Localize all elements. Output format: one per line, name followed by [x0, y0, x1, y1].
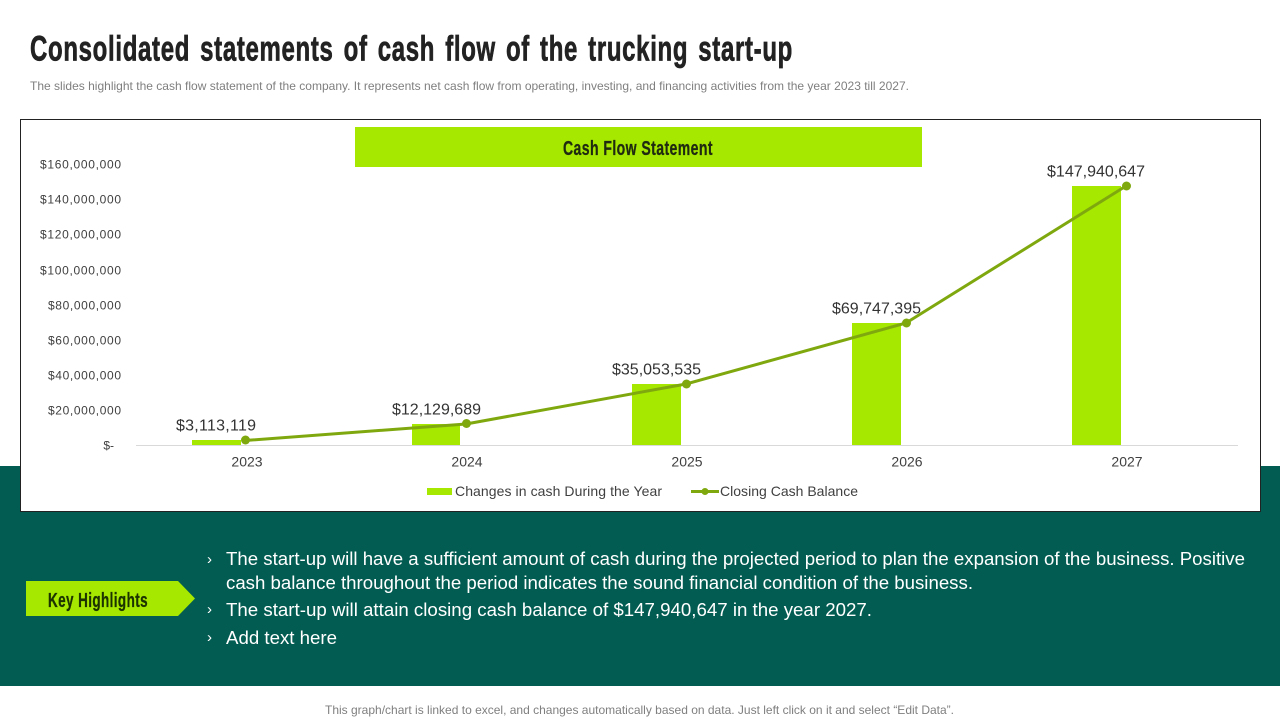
- y axis labels: $120,000,000: [40, 228, 121, 242]
- key highlights arrow: [26, 581, 195, 616]
- y axis labels: $100,000,000: [40, 264, 121, 278]
- footer note: This graph/chart is linked to excel, and changes automatically based on data. Just left click on it and select “Edit Data”.: [325, 703, 954, 717]
- data labels: $35,053,535: [612, 362, 701, 378]
- x axis labels: 2023: [231, 454, 263, 470]
- subtitle: The slides highlight the cash flow statement of the company. It represents net cash flow from operating, investing, and financing activities from the year 2023 till 2027.: [30, 79, 909, 93]
- y axis labels: $160,000,000: [40, 158, 121, 172]
- data labels: $147,940,647: [1047, 164, 1145, 180]
- y axis labels: $40,000,000: [48, 368, 121, 382]
- y axis labels: [40, 158, 121, 452]
- data labels: [176, 164, 1145, 434]
- bars: changes in cash: [192, 186, 1121, 445]
- highlights list: ›: [207, 601, 212, 618]
- title: Consolidated statements of cash flow of the trucking start-up: [30, 30, 793, 68]
- legend: [427, 483, 858, 499]
- highlights list: ›: [207, 629, 212, 646]
- highlights list: [207, 549, 1245, 648]
- x axis labels: 2025: [671, 454, 703, 470]
- x axis labels: 2026: [891, 454, 923, 470]
- data labels: $12,129,689: [392, 402, 481, 418]
- key highlights arrow: Key Highlights: [48, 590, 148, 612]
- highlights list: The start-up will attain closing cash balance of $147,940,647 in the year 2027.: [226, 600, 872, 620]
- highlights list: Add text here: [226, 628, 337, 648]
- legend: Closing Cash Balance: [720, 483, 858, 499]
- data labels: $3,113,119: [176, 418, 256, 434]
- panel: chart: [20, 120, 1260, 512]
- dark green band: [0, 466, 1280, 686]
- line: closing cash balance: [241, 182, 1131, 444]
- y axis labels: $20,000,000: [48, 404, 121, 418]
- x axis labels: [231, 454, 1143, 470]
- highlights list: ›: [207, 551, 212, 568]
- chart heading: Cash Flow Statement: [563, 138, 713, 160]
- x axis labels: 2027: [1111, 454, 1143, 470]
- data labels: $69,747,395: [832, 300, 921, 318]
- highlights list: cash balance throughout the period indicates the sound financial condition of the business.: [226, 573, 973, 593]
- y axis labels: $-: [103, 438, 114, 452]
- y axis labels: $80,000,000: [48, 298, 121, 312]
- x axis labels: 2024: [451, 454, 483, 470]
- y axis labels: $140,000,000: [40, 192, 121, 206]
- y axis labels: $60,000,000: [48, 334, 121, 348]
- x axis line: [136, 444, 1238, 446]
- highlights list: The start-up will have a sufficient amount of cash during the projected period to plan the expansion of the business. Positive: [226, 549, 1245, 569]
- chart heading: [355, 127, 922, 167]
- legend: Changes in cash During the Year: [455, 483, 662, 499]
